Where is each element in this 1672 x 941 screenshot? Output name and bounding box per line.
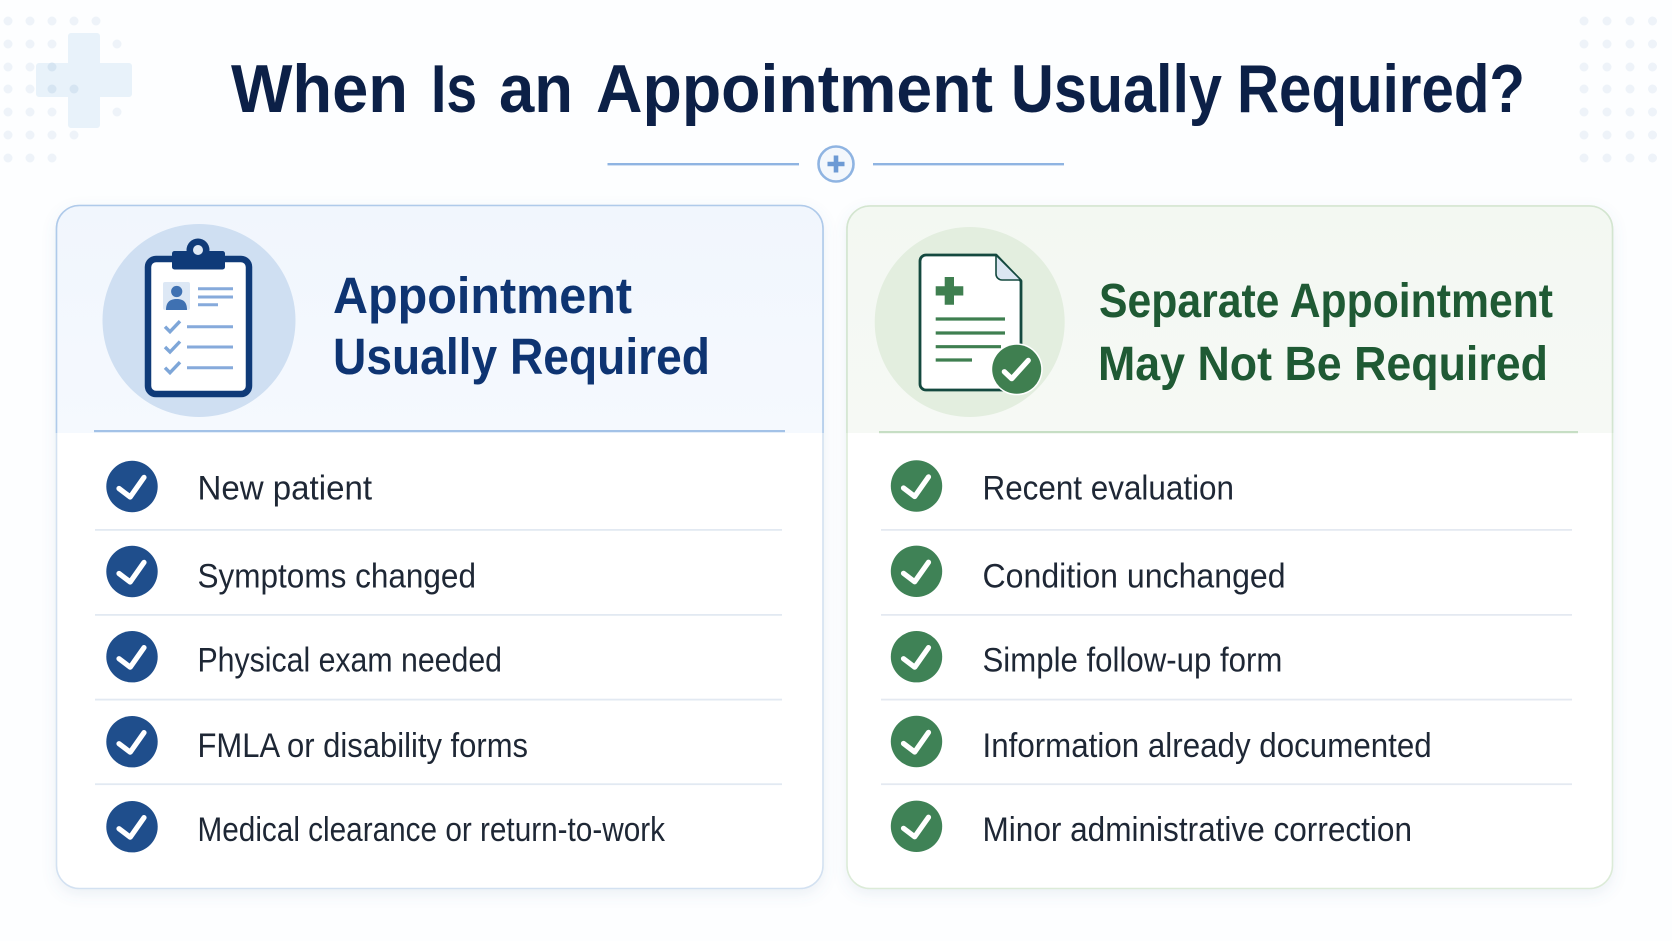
row: FMLA or disability forms xyxy=(106,716,528,767)
panel card xyxy=(56,206,823,888)
icon: clipboard xyxy=(102,224,296,417)
row: Simple follow-up form: Simple follow-up form xyxy=(982,642,1282,680)
title: Appointment xyxy=(596,51,993,127)
title: Is xyxy=(431,51,477,127)
panel heading: May Not Be Required xyxy=(1098,338,1548,391)
panel: separate appointment may not be required xyxy=(847,206,1612,888)
row: Physical exam needed xyxy=(106,631,502,682)
panel header band xyxy=(56,206,823,433)
row: Medical clearance or return-to-work xyxy=(106,801,666,852)
panel heading: Separate Appointment xyxy=(1099,275,1553,328)
panel header band xyxy=(847,206,1612,433)
panel heading: Usually Required xyxy=(333,328,710,385)
panel heading: Appointment xyxy=(333,267,632,324)
panel: appointment usually required xyxy=(56,206,823,888)
row: Information already documented: Information already documented xyxy=(982,727,1432,765)
panel heading xyxy=(333,267,710,385)
panel card xyxy=(847,206,1612,888)
icon: medical document with check xyxy=(875,227,1065,417)
row: Information already documented xyxy=(891,716,1432,767)
panel heading xyxy=(1098,275,1553,391)
row: Symptoms changed: Symptoms changed xyxy=(198,558,476,596)
row: FMLA or disability forms: FMLA or disability forms xyxy=(198,727,528,765)
row: Simple follow-up form xyxy=(891,631,1282,682)
row: Minor administrative correction: Minor administrative correction xyxy=(982,811,1412,849)
row: Condition unchanged: Condition unchanged xyxy=(982,558,1286,596)
title: Usually xyxy=(1011,51,1222,127)
title: Required? xyxy=(1237,51,1525,127)
row: Symptoms changed xyxy=(106,546,476,597)
row: Recent evaluation: Recent evaluation xyxy=(982,469,1234,507)
row: New patient xyxy=(106,461,372,512)
title: an xyxy=(499,51,573,127)
icon: faded medical cross xyxy=(36,33,132,128)
title divider with plus badge xyxy=(608,146,1064,182)
row: Medical clearance or return-to-work: Medical clearance or return-to-work xyxy=(198,811,666,849)
title xyxy=(231,51,1525,127)
row: Minor administrative correction xyxy=(891,801,1412,852)
row: Physical exam needed: Physical exam needed xyxy=(198,642,502,680)
title: When xyxy=(231,51,408,127)
row: Recent evaluation xyxy=(891,460,1234,512)
row: New patient: New patient xyxy=(198,469,372,507)
row: Condition unchanged xyxy=(891,546,1286,597)
